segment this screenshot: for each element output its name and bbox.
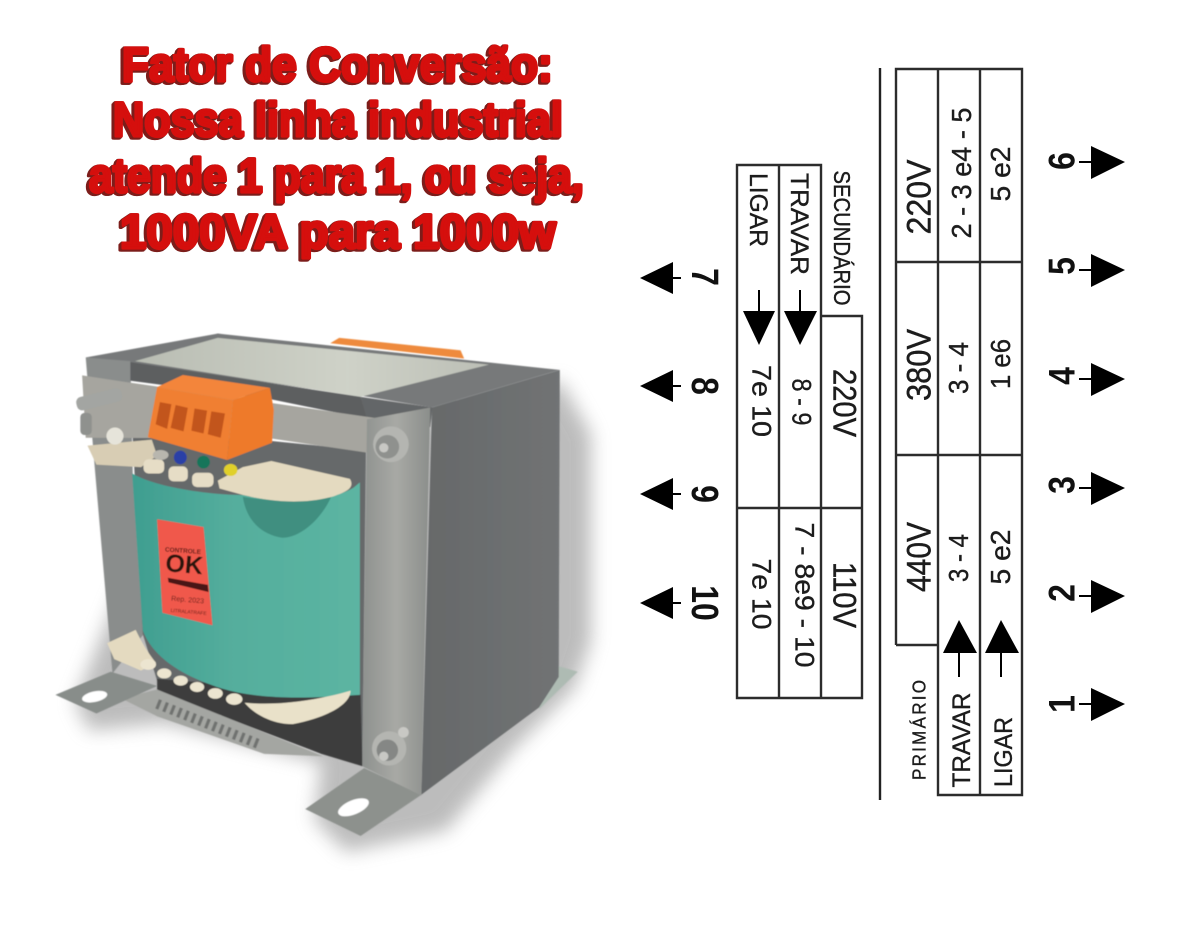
terminal 8	[640, 370, 726, 402]
red inspection label	[157, 519, 212, 625]
orange terminal block	[148, 375, 274, 460]
terminal 5	[1042, 254, 1125, 287]
wiring table: primary: 5 e2	[985, 146, 1016, 202]
terminal 3: 3	[1042, 476, 1083, 494]
core front corner block	[361, 397, 433, 427]
TRAVAR down arrow	[784, 290, 817, 345]
terminal 2: 2	[1042, 584, 1083, 602]
coloured wires	[153, 450, 237, 476]
wiring table: secondary	[737, 165, 862, 698]
top winding beads	[144, 459, 214, 487]
far right mounting foot	[539, 662, 578, 709]
terminal 4	[1042, 363, 1125, 396]
title: conversion factor	[89, 39, 584, 259]
teal coil	[132, 474, 360, 698]
terminal 5: 5	[1042, 257, 1083, 275]
LIGAR up arrow	[985, 620, 1019, 677]
red inspection label: LITRALATRAFE	[170, 608, 208, 617]
left mounting foot	[55, 672, 157, 713]
right mounting foot	[305, 768, 421, 836]
terminal 2	[1042, 580, 1125, 613]
serrated lamination strip	[121, 689, 323, 756]
cream winding top right	[218, 461, 351, 501]
title line 2: Nossa linha industrial	[113, 94, 563, 147]
primary heading: PRIMÁRIO	[909, 680, 930, 780]
cream winding bottom left	[107, 630, 156, 671]
wiring table: primary	[880, 68, 1022, 800]
primary divider line	[879, 68, 881, 800]
secondary heading: SECUNDÁRIO	[828, 170, 853, 306]
cream winding bottom	[245, 691, 351, 724]
title line 1: Fator de Conversão:	[122, 39, 553, 92]
terminals 1 to 6	[1042, 146, 1125, 721]
right dark face	[421, 370, 560, 795]
red inspection label: Rep. 2023	[171, 595, 204, 605]
dark gap below coil	[157, 679, 362, 766]
terminals 7 to 10	[640, 262, 726, 621]
top of the core	[86, 334, 560, 407]
terminal 1	[1042, 688, 1125, 721]
terminal 8: 8	[683, 377, 726, 395]
terminal 4: 4	[1042, 367, 1083, 385]
terminal 10	[640, 585, 726, 621]
380 V row values: 380V	[899, 329, 938, 401]
secondary table grid	[737, 165, 862, 698]
terminal 3	[1042, 472, 1125, 505]
transformer illustration	[55, 334, 591, 852]
title line 3: atende 1 para 1, ou seja,	[89, 150, 584, 203]
orange top tab	[330, 338, 464, 359]
vertical metal plate	[362, 407, 430, 796]
wiring table: secondary: 8 - 9	[786, 378, 816, 426]
LIGAR label: LIGAR	[744, 173, 772, 247]
wiring table: primary: 3 - 4	[943, 342, 974, 394]
metal top strip	[82, 375, 427, 453]
lower right bolt	[372, 727, 409, 766]
440 V row values: 440V	[899, 522, 938, 592]
title line 4: 1000VA para 1000w	[120, 206, 557, 259]
terminal 7	[640, 262, 726, 294]
terminal 9	[640, 478, 726, 510]
terminal 6: 6	[1042, 152, 1083, 170]
wiring table: primary: 2 - 3 e4 - 5	[946, 108, 977, 238]
drop shadow	[75, 381, 591, 852]
coil shaded wedge	[243, 495, 332, 538]
bottom winding beads	[140, 659, 242, 705]
cream winding top left	[87, 440, 157, 467]
terminal 1: 1	[1042, 695, 1083, 713]
red inspection label: CONTROLE	[165, 547, 202, 556]
top label plate	[135, 338, 489, 397]
wing nut at left	[75, 387, 124, 445]
wiring table: primary: 3 - 4	[943, 534, 974, 582]
terminal 9: 9	[683, 485, 726, 503]
terminal 6	[1042, 146, 1125, 179]
upper right bolt	[373, 426, 409, 462]
wiring table: primary: 5 e2	[985, 530, 1016, 584]
LIGAR down arrow	[743, 290, 775, 345]
terminal 7: 7	[683, 268, 726, 286]
wiring table: secondary: 110V	[826, 562, 862, 628]
red inspection label: OK	[164, 549, 204, 580]
220 V row values: 220V	[899, 159, 938, 234]
TRAVAR label: TRAVAR	[785, 173, 813, 275]
left core side	[86, 357, 144, 673]
terminal 10: 10	[683, 585, 726, 621]
TRAVAR up arrow	[943, 620, 977, 677]
TRAVAR label: TRAVAR	[948, 692, 976, 788]
110 V column values: 7e 10	[746, 558, 776, 630]
dark band under top	[130, 362, 368, 419]
inner core	[132, 427, 366, 766]
220 V column values: 7e 10	[746, 365, 776, 437]
primary table grid	[896, 69, 1022, 795]
wiring table: primary: 1 e6	[985, 339, 1016, 389]
wiring table: secondary: 220V	[826, 369, 862, 437]
wiring table: secondary: 7 - 8e9 - 10	[789, 522, 819, 668]
LIGAR label: LIGAR	[990, 717, 1018, 787]
